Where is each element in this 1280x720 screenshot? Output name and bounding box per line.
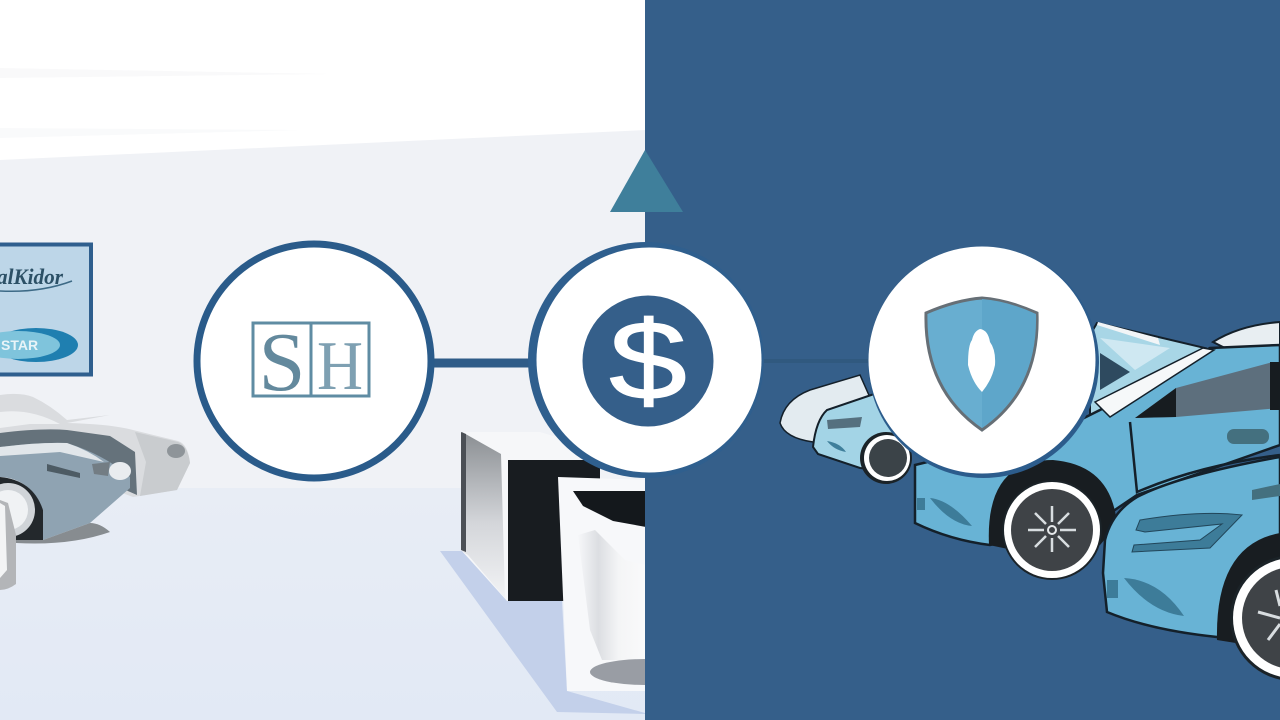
icon: upward triangle arrow <box>610 150 683 212</box>
left stand <box>461 432 600 601</box>
circle: SH logo <box>197 244 431 478</box>
rear white blue car <box>1090 322 1205 420</box>
wall sign <box>0 244 91 374</box>
wheel arch <box>1217 533 1280 650</box>
wheel <box>1002 480 1102 580</box>
door panel <box>1130 422 1280 492</box>
display stands <box>440 432 700 714</box>
icon: dollar coin: $ <box>609 298 687 423</box>
sign badge: STAR <box>1 337 38 353</box>
blue car fleet <box>780 322 1280 681</box>
wheel <box>1230 555 1280 681</box>
icon: SH emblem <box>253 316 369 409</box>
wheel arch <box>989 460 1117 560</box>
panel: light showroom background <box>0 0 646 720</box>
top right white roof <box>1213 322 1280 348</box>
grille mark <box>1124 578 1184 616</box>
icon: SH emblem: H <box>317 328 363 405</box>
connector between circles <box>430 358 534 368</box>
circle: dollar <box>528 242 764 478</box>
faint connector on blue panel <box>760 359 870 363</box>
windscreen strip <box>1095 348 1214 417</box>
rear grey car <box>0 394 190 497</box>
large blue car <box>915 345 1280 580</box>
icon: dollar coin <box>582 296 714 426</box>
shield white mark <box>968 329 995 392</box>
front grey-blue car <box>0 443 131 540</box>
grey showroom cars <box>0 394 190 590</box>
side window <box>1135 362 1280 418</box>
icon: SH emblem: S <box>259 316 305 409</box>
panel: dark blue background <box>645 0 1280 720</box>
headlight marks <box>930 498 972 526</box>
stand floor shadow <box>440 551 645 714</box>
foreground grey block <box>0 500 16 590</box>
white distant car <box>780 375 880 442</box>
circle: shield <box>868 246 1099 478</box>
headlight <box>1132 513 1242 552</box>
right stand <box>558 477 700 691</box>
hood vent <box>1252 484 1280 500</box>
foreground blue car <box>1103 457 1280 681</box>
door handle <box>1227 429 1269 444</box>
grey car shadow <box>16 523 110 544</box>
icon: shield <box>926 298 1037 430</box>
small blue car <box>813 392 912 484</box>
grey car wheel <box>0 477 43 540</box>
